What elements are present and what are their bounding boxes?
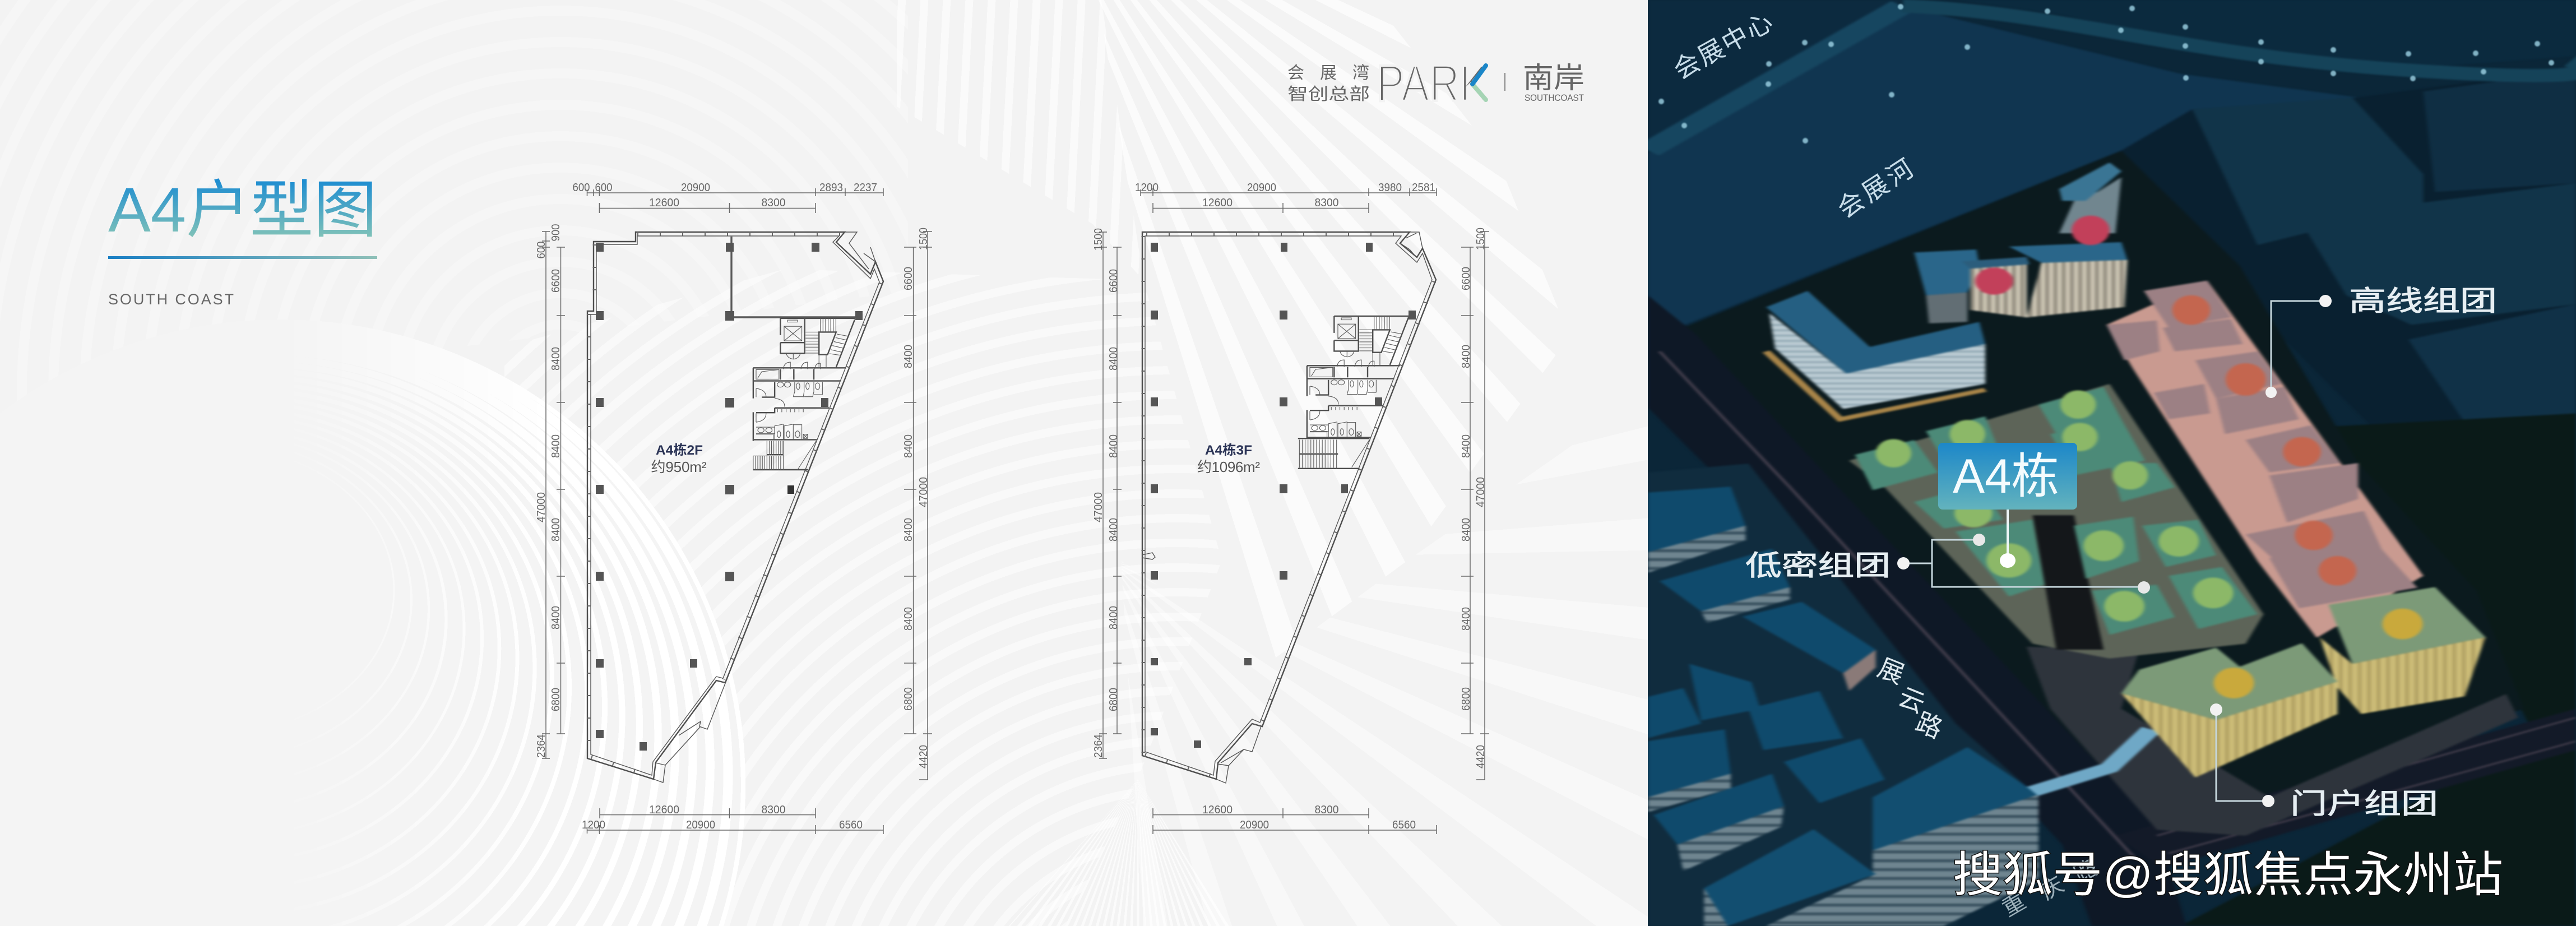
plan 2F dimension numbers: 12600	[649, 804, 679, 816]
plan 3F dimension numbers: 6600	[1460, 267, 1472, 290]
callout: A4 building	[1938, 443, 2077, 568]
logo: tagline: 智创总部	[1287, 85, 1370, 104]
plan 3F dimension numbers: 8400	[1460, 345, 1472, 368]
map label: Zhanyun Road: 云	[1894, 682, 1929, 719]
left lower district	[1707, 464, 2019, 781]
map label: convention river: 会展河	[1832, 151, 1921, 224]
plan 2F dimension numbers: 8400	[550, 347, 562, 371]
plan 3F balconies	[1142, 232, 1423, 783]
plan 3F service core	[1307, 316, 1409, 439]
callout: high-line group: 高线组团	[2349, 285, 2497, 317]
plan 3F dimension numbers: 8400	[1108, 606, 1120, 629]
plan 2F dimension numbers: 6600	[902, 267, 915, 290]
plan 2F dimension numbers: 6800	[550, 688, 562, 711]
background: concentric wave rings	[472, 361, 745, 926]
plan 2F dimension numbers: 47000	[535, 492, 548, 522]
plan 2F dimension numbers: 8400	[902, 434, 915, 458]
subtitle: SOUTH COAST	[108, 291, 234, 308]
plan 2F dimension numbers: 1200	[582, 819, 605, 831]
central dark ground	[1683, 151, 2524, 836]
plan 3F dimension numbers: 6560	[1392, 819, 1416, 831]
panel: aerial site map	[1648, 0, 2576, 926]
plan 2F dimension numbers: 2237	[854, 182, 877, 194]
background pattern: lower right fan	[0, 0, 1648, 926]
logo: K chevron	[1472, 66, 1486, 100]
plan 2F dimension numbers: 8400	[902, 607, 915, 631]
plan 2F inner wall	[591, 236, 879, 775]
plan 2F dimension numbers: 6600	[550, 269, 562, 293]
plan 3F dimension numbers: 8300	[1315, 197, 1338, 209]
plan 2F dimension numbers: 6800	[902, 687, 915, 711]
plan 2F dimension numbers: 600	[535, 241, 548, 259]
plan 3F window ticks	[1143, 234, 1434, 776]
plan 2F dimension numbers: 600	[595, 182, 612, 194]
plan 2F label: A4栋2F	[656, 443, 703, 458]
gate group T1	[2121, 682, 2337, 777]
plan 2F columns	[596, 243, 863, 751]
plan 2F area: 约950m²	[651, 459, 707, 475]
map label: convention center: 会展中心	[1669, 6, 1779, 85]
logo: project name: 会展湾	[1287, 64, 1385, 82]
plan 3F dimension numbers: 3980	[1378, 182, 1402, 194]
map label: Zhanyun Road: 展	[1874, 652, 1908, 689]
plan 2F dimension numbers: 20900	[681, 182, 710, 194]
plan 3F area: 约1096m²	[1197, 459, 1260, 475]
plan 2F dimension numbers: 8400	[550, 434, 562, 458]
plan 3F dimension numbers: 12600	[1202, 197, 1233, 209]
plan 3F dimension numbers: 47000	[1092, 492, 1105, 522]
logo: divider	[1504, 73, 1505, 91]
plan 3F label: A4栋3F	[1205, 443, 1252, 458]
plan 2F dimension lines	[542, 188, 932, 834]
plan 2F dimension numbers: 600	[573, 182, 590, 194]
callout: low-density group: 低密组团	[1745, 550, 1891, 581]
logo: PARK wordmark: PARK	[1377, 55, 1488, 112]
watermark: 搜狐号@搜狐焦点永州站	[1953, 848, 2503, 902]
plan 3F lower stairs	[1298, 438, 1369, 469]
gate group T2	[2320, 637, 2485, 714]
map artwork	[1648, 0, 2576, 926]
plan 3F dimension numbers: 8400	[1108, 347, 1120, 371]
plan 2F outer wall	[587, 232, 883, 779]
background pattern: upper diagonal fan	[0, 0, 1648, 926]
plan 2F dimension numbers: 8400	[902, 345, 915, 368]
plan 2F dimension numbers: 4420	[918, 745, 930, 768]
plan 3F dimension numbers: 8300	[1315, 804, 1338, 816]
callout: gate group	[2210, 703, 2438, 819]
plan 3F dimension numbers: 8400	[1460, 607, 1472, 631]
E towers	[1926, 293, 1967, 323]
pink high-line group	[2106, 280, 2423, 638]
lower right dark greenery	[2180, 414, 2576, 926]
panel: floor plan A4 3F	[1092, 182, 1489, 834]
background pattern: bottom fan	[0, 0, 1648, 926]
plan 2F dimension numbers: 2893	[819, 182, 843, 194]
plan 3F dimension numbers: 6800	[1460, 687, 1472, 711]
map label: Chongqing Road	[1998, 855, 2102, 922]
plan 2F dimension numbers: 6560	[839, 819, 863, 831]
plan 3F outer wall	[1142, 232, 1436, 779]
plan 3F dimension numbers: 20900	[1247, 182, 1276, 194]
plan 3F dimension numbers: 8400	[1460, 434, 1472, 458]
background: wave blob fill	[0, 0, 1648, 926]
plan 3F dimension numbers: 1500	[1475, 228, 1487, 250]
plan 3F dimension numbers: 6600	[1108, 269, 1120, 293]
green low-density group	[1849, 384, 2263, 659]
plan 3F dimension numbers: 20900	[1240, 819, 1269, 831]
logo	[1287, 55, 1584, 112]
plan 3F dimension numbers: 6800	[1108, 688, 1120, 711]
logo: South Coast Chinese: 南岸	[1523, 62, 1584, 95]
plan 2F dimension numbers	[535, 182, 930, 831]
plan 2F partition wall	[731, 237, 858, 317]
plan 3F dimension numbers: 8400	[1460, 518, 1472, 541]
plan 2F dimension numbers: 47000	[918, 477, 930, 507]
plan 3F dimension numbers: 1500	[1092, 228, 1105, 251]
map label: Zhanyun Road	[1874, 652, 1947, 744]
plaza	[2027, 647, 2518, 836]
left road	[1648, 295, 2186, 926]
sky bridge	[2032, 729, 2151, 791]
background pattern: lower arcs	[0, 0, 1648, 926]
panel: floor plan A4 2F	[535, 182, 932, 834]
title: A4户型图	[108, 175, 377, 245]
plan 2F balconies	[654, 232, 875, 783]
callout: gate group: 门户组团	[2290, 788, 2438, 819]
plan 2F dimension numbers: 8300	[761, 197, 786, 209]
plan 2F dimension numbers: 20900	[686, 819, 715, 831]
plan 3F dimension numbers: 12600	[1202, 804, 1233, 816]
map label: Chongqing Road: 庆	[2036, 872, 2068, 905]
background pattern: upper arcs	[0, 0, 1648, 926]
plan 3F inner wall	[1145, 236, 1432, 775]
plan 3F dimension numbers: 47000	[1475, 477, 1487, 507]
plan 2F dimension numbers: 8400	[550, 518, 562, 541]
map dots	[1658, 4, 2554, 143]
plan 2F lower stairs	[753, 441, 816, 470]
plan 2F dimension numbers: 900	[550, 224, 562, 241]
title underline	[108, 256, 377, 259]
plan 3F dimension numbers: 2364	[1092, 734, 1105, 758]
callout: A4 building: A4栋	[1953, 450, 2059, 503]
plan 3F dimension numbers: 8400	[1108, 434, 1120, 458]
map label: Chongqing Road: 路	[2070, 855, 2102, 888]
plan 2F window ticks	[589, 234, 881, 776]
callout: low-density group	[1745, 534, 2150, 594]
plan 3F dimension numbers: 1200	[1135, 182, 1159, 194]
E white building	[1769, 313, 1985, 409]
plan 3F dimension numbers	[1092, 182, 1487, 831]
plan 2F dimension numbers: 8400	[902, 518, 915, 541]
plan 2F service core	[753, 318, 855, 441]
plan 3F dimension numbers: 2581	[1412, 182, 1435, 194]
plan 2F dimension numbers: 8300	[761, 804, 786, 816]
plan 3F columns	[1151, 243, 1416, 748]
logo: South Coast English: SOUTHCOAST	[1525, 92, 1584, 103]
plan 3F dimension numbers: 8400	[1108, 518, 1120, 541]
plan 3F dimension lines	[1099, 188, 1489, 834]
background pattern: vertical stripes	[0, 0, 1648, 926]
plan 2F dimension numbers: 2364	[535, 734, 548, 758]
plan 2F dimension numbers: 1500	[918, 228, 930, 250]
plan 2F dimension numbers: 8400	[550, 606, 562, 629]
callout: high-line group	[2265, 285, 2497, 398]
lower road	[2160, 710, 2576, 865]
plan 3F dimension numbers: 4420	[1475, 745, 1487, 768]
plan 2F dimension numbers: 12600	[649, 197, 679, 209]
map label: Zhanyun Road: 路	[1912, 707, 1947, 744]
map label: Chongqing Road: 重	[1998, 889, 2030, 922]
